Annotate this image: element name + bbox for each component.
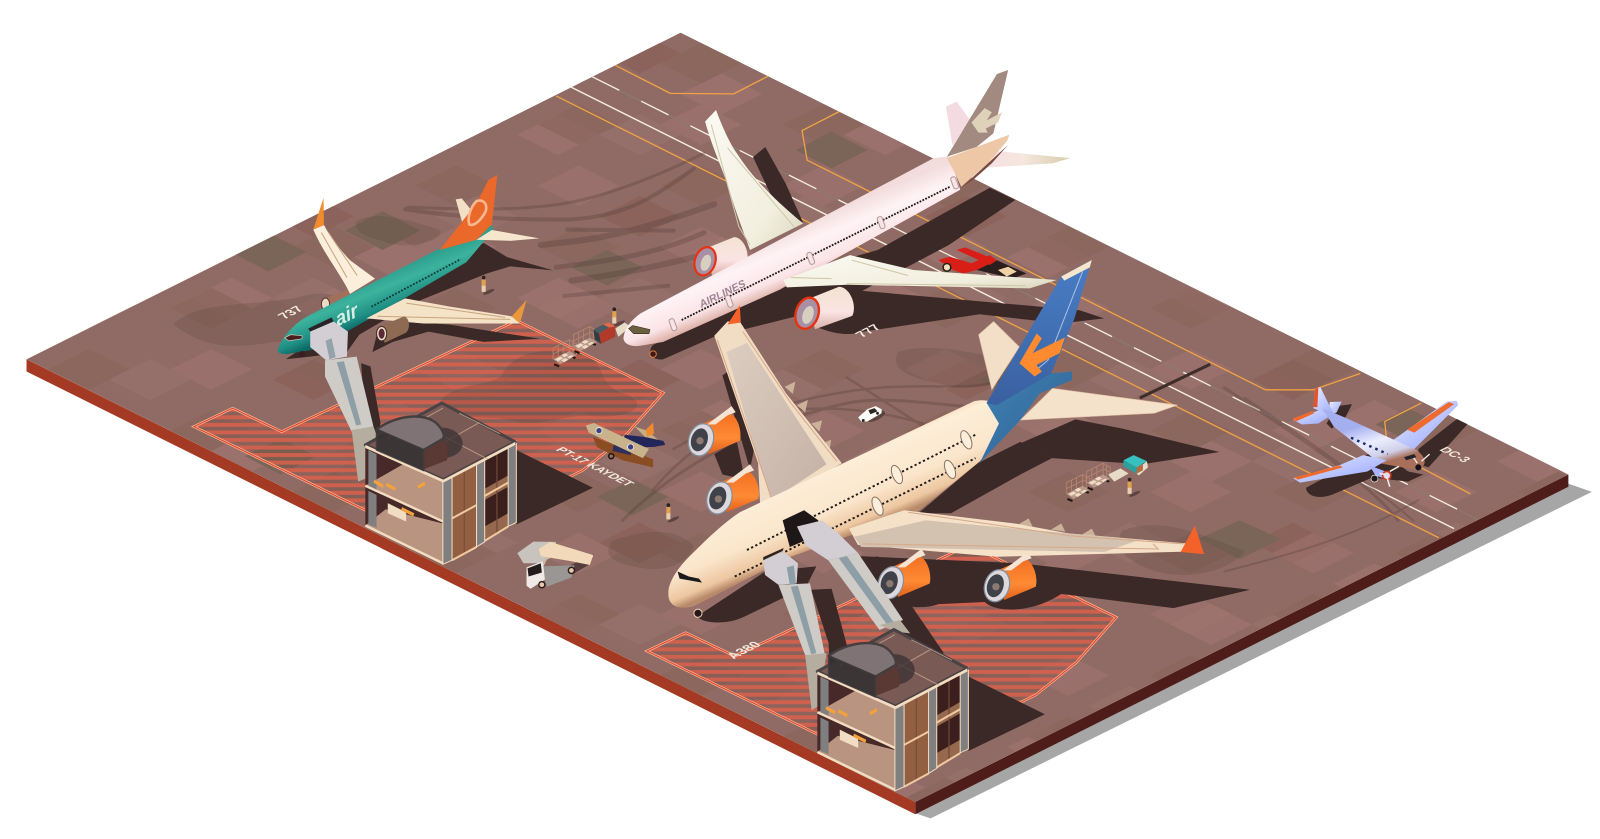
DC-3 stabilizers	[1293, 408, 1335, 424]
737 right stabilizer	[477, 230, 539, 241]
shadow: right jet bridges	[812, 556, 944, 663]
777 tail fin	[947, 70, 1008, 157]
737 windows	[371, 259, 461, 307]
737 airline wordmark: air	[333, 299, 361, 331]
biplane lower wing and body	[593, 437, 653, 467]
shadow: 737	[286, 243, 553, 359]
teal baggage tug	[1123, 455, 1148, 476]
bridge tunnel	[325, 357, 373, 432]
parking stand hatched left	[191, 320, 666, 512]
label: 777: 777	[852, 322, 885, 339]
biplane PT-17 Kaydet	[586, 422, 665, 467]
DC-3 cockpit	[1404, 454, 1416, 460]
A380 tail fin	[986, 260, 1092, 405]
aircraft: A380	[668, 260, 1204, 617]
stairs truck	[517, 542, 594, 589]
shadow: right tower	[968, 677, 1045, 751]
777 cockpit	[629, 326, 650, 334]
777 fuselage	[623, 156, 960, 346]
rear bridge cab	[783, 510, 818, 547]
biplane upper wing	[586, 423, 649, 458]
A380 windows	[735, 429, 976, 577]
shadow: 777	[650, 147, 1104, 359]
DC-3 near wing	[1293, 455, 1387, 483]
DC-3 fuselage	[1322, 408, 1425, 470]
rear bridge rotunda	[880, 620, 910, 633]
A380 fuselage	[668, 400, 999, 608]
737 near wing	[366, 298, 527, 323]
777 windows	[668, 176, 959, 331]
label: A380: A380	[723, 640, 765, 661]
platform right side	[915, 474, 1568, 814]
baggage tug	[593, 322, 631, 344]
777 far engine	[691, 237, 748, 278]
shadow: left tower	[516, 450, 593, 524]
shadow: DC-3	[1306, 404, 1474, 497]
shadow: left jet bridge	[361, 363, 381, 438]
737 far wing	[313, 198, 375, 294]
olive floor tiles	[231, 132, 1441, 559]
DC-3 windows	[1351, 438, 1388, 454]
ground shadow	[915, 484, 1592, 818]
forward bridge tunnel	[778, 583, 825, 655]
777 tail cone	[947, 135, 1009, 187]
bridge cab dark	[308, 317, 334, 332]
shadow: A380	[697, 369, 1250, 622]
taxi lines	[556, 65, 1480, 538]
DC-3 far propeller	[1413, 454, 1430, 470]
aircraft labels	[274, 304, 1474, 661]
A380 cockpit	[678, 571, 702, 583]
777 left stabilizer	[946, 102, 970, 146]
left jet bridge	[308, 317, 377, 482]
forward bridge rotunda	[805, 653, 827, 710]
aircraft: 737	[278, 175, 539, 357]
A380 far engine outer	[684, 406, 741, 459]
A380 near engine inner	[874, 549, 930, 602]
737 cockpit	[285, 335, 302, 341]
DC-3 tail fin	[1313, 387, 1337, 418]
baggage carts near 777	[553, 322, 631, 366]
biplane propeller	[609, 454, 614, 459]
737 far engine	[321, 288, 357, 310]
label: PT-17 Kaydet: PT-17 KAYDET	[552, 445, 637, 488]
biplane tail	[624, 422, 665, 447]
777 right stabilizer	[977, 151, 1070, 168]
777 near engine	[792, 287, 854, 332]
left terminal tower	[365, 403, 516, 564]
777 airline wordmark: AIRLINES	[699, 278, 747, 311]
platform front side	[27, 359, 915, 814]
A380 nose gear	[694, 609, 702, 617]
A380 blue rear fuselage	[980, 371, 1072, 463]
tire marks	[405, 153, 1418, 571]
aircraft: DC-3	[1293, 387, 1458, 487]
right jet bridges	[763, 510, 910, 710]
aircraft ground shadows	[286, 147, 1474, 751]
A380 right stabilizer	[1020, 388, 1178, 420]
forward bridge head	[763, 552, 798, 585]
A380 left stabilizer	[979, 321, 1019, 390]
right terminal tower	[817, 630, 968, 791]
737 near engine	[377, 316, 409, 343]
aircraft: 777	[623, 70, 1070, 357]
bridge rotunda	[352, 427, 377, 482]
cloud shadows	[173, 216, 1245, 575]
737 left stabilizer	[456, 198, 471, 227]
777 near wing	[783, 255, 1057, 288]
bridge head	[310, 321, 348, 360]
DC-3 far wing	[1393, 401, 1458, 450]
777 nose gear	[650, 351, 656, 357]
parking stand hatched right	[644, 552, 1118, 736]
ground crew figures	[482, 276, 1141, 523]
A380 far engine inner	[703, 464, 759, 517]
737 nose gear	[299, 351, 305, 357]
rear bridge tunnel	[828, 553, 903, 630]
777 far wing	[705, 110, 803, 250]
DC-3 near engine and propeller	[1369, 465, 1399, 487]
baggage carts near A380	[1066, 455, 1148, 501]
A380 near wing	[849, 510, 1204, 557]
label: DC-3: DC-3	[1436, 445, 1474, 464]
rear bridge head	[797, 520, 858, 560]
ground vehicle: red tug	[938, 247, 1027, 278]
A380 far wing	[714, 305, 842, 507]
A380 near engine outer	[980, 552, 1036, 605]
label: 737: 737	[274, 304, 307, 321]
737 fuselage	[278, 225, 493, 354]
737 tail fin	[440, 175, 497, 250]
white car	[858, 406, 886, 424]
dark runway stripe	[1140, 364, 1210, 398]
